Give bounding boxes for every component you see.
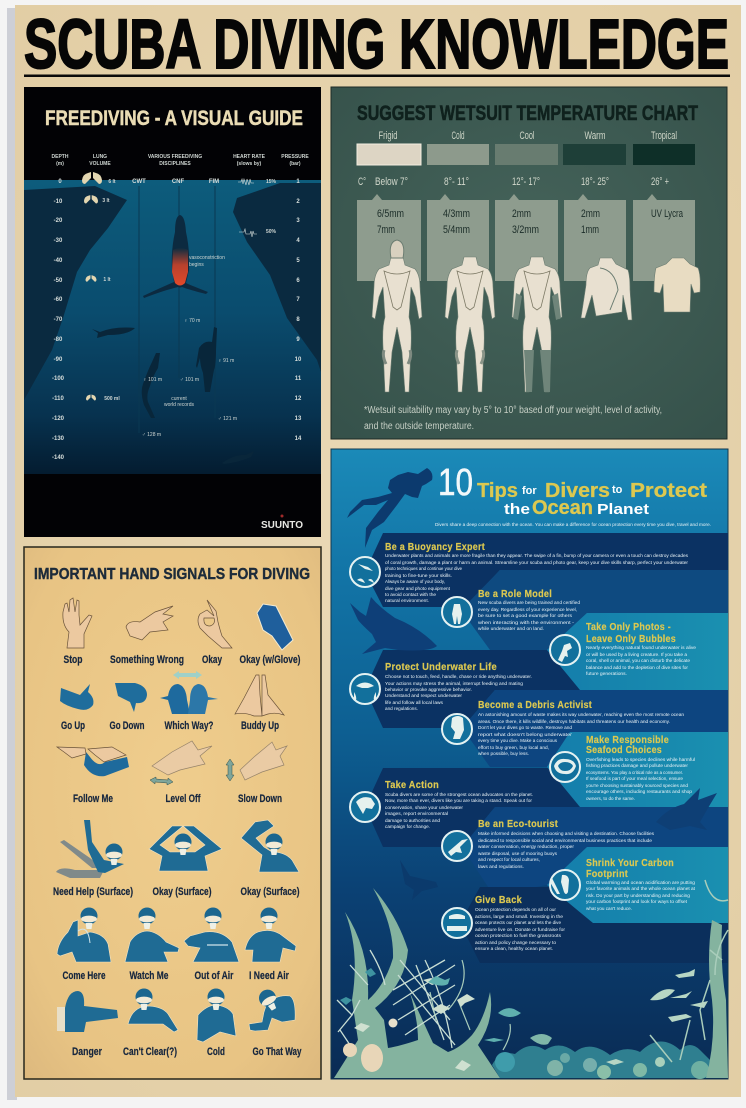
tip: give back: Give Back — [475, 895, 522, 906]
tip: photos: balance and add to the depletion of dive sites for — [586, 665, 688, 670]
tip: photos: Nearly everything natural found underwater is alive — [586, 645, 696, 650]
heading: ten tips: Planet — [597, 501, 649, 518]
discipline labels — [132, 179, 219, 185]
band: seafood — [547, 732, 728, 807]
tip: debris — [478, 700, 684, 756]
silhouette: scuba diver — [347, 468, 432, 548]
signal: which way — [160, 671, 218, 732]
temperature labels: Warm — [584, 130, 606, 142]
lung volume icons — [82, 172, 120, 402]
signal: cold — [197, 988, 236, 1058]
column headers: HEART RATE — [233, 154, 266, 160]
heading: ten tips: 10 — [438, 462, 473, 504]
text: vasoconstriction: vasoconstriction — [189, 255, 225, 261]
tip: buoyancy: natural environment. — [385, 598, 429, 603]
pressure scale: 14 — [295, 436, 302, 442]
silhouette: shark lower — [400, 860, 438, 900]
seaweed and coral — [334, 880, 728, 1079]
column headers: LUNG — [93, 154, 107, 160]
tip: eco-tourist: waste disposal, use of mooring buoys — [478, 851, 558, 856]
signal: level off — [150, 741, 212, 805]
tip: seafood: owners, to do the same. — [586, 796, 635, 801]
intro text: Divers share a deep connection with the ocean. You can make a difference for ocean protection every time you dive, travel and more. — [435, 522, 711, 527]
heart rate values — [266, 179, 277, 235]
tip: eco-tourist: dedicated to responsible social and environmental business practices that include — [478, 838, 652, 843]
tip: take action: Take Action — [385, 780, 439, 791]
tip: take action: Scuba divers are some of the strongest ocean advocates on the planet. — [385, 792, 533, 797]
signal: something wrong — [110, 606, 184, 666]
title rule — [24, 74, 730, 77]
tip: seafood: Overfishing leads to species declines while harmful — [586, 757, 695, 762]
tip: role model: be sure to set a good example for others — [478, 613, 573, 618]
panel: wetsuit chart — [331, 87, 727, 439]
signal: go up: Go Up — [61, 720, 85, 732]
tip: debris: report what doesn't belong underwater — [478, 732, 573, 737]
record labels — [142, 318, 237, 438]
depth scale: -120 — [52, 416, 65, 422]
signal: go that way: Go That Way — [252, 1046, 302, 1058]
signal: buddy up: Buddy Up — [241, 720, 279, 732]
fish — [92, 328, 135, 338]
column headers: PRESSURE — [281, 154, 309, 160]
signal: i need air — [245, 908, 296, 982]
tip: seafood: Seafood Choices — [586, 745, 662, 756]
temperature labels: Frigid — [378, 130, 398, 142]
heading: ten tips: Ocean — [532, 497, 593, 519]
signal: come here: Come Here — [62, 970, 106, 982]
lung volume icons: 6 lt — [108, 179, 116, 185]
tip: give back — [475, 895, 565, 951]
wetsuit: full — [445, 257, 495, 392]
tip: photos: coral, shell or animal, you can disturb the delicate — [586, 658, 690, 663]
tip: eco-tourist: laws and regulations. — [478, 864, 524, 869]
heart rate traces — [238, 179, 257, 237]
tip: eco-tourist — [478, 819, 655, 869]
silhouette: shark — [350, 597, 437, 654]
depth scale: -110 — [52, 396, 64, 402]
tip: debris: Become a Debris Activist — [478, 700, 592, 711]
band: buoyancy — [365, 533, 728, 607]
discipline labels: CWT — [132, 179, 146, 185]
tip: shrink carbon: your carbon footprint and look for ways to offset — [586, 899, 688, 904]
depth scale: 0 — [58, 179, 62, 185]
column headers: VOLUME — [89, 161, 111, 167]
tip: take action — [385, 780, 533, 829]
signal: slow down — [226, 742, 287, 805]
pressure scale: 8 — [296, 317, 300, 323]
dark rock walls — [24, 183, 321, 400]
temperature ranges: 12°- 17° — [512, 176, 540, 188]
poster shadow — [7, 8, 17, 1100]
tip: debris: An astonishing amount of waste makes its way underwater, reaching even the most remote ocean — [478, 712, 684, 717]
tip: protect: Your actions may stress the animal, interrupt feeding and mating — [385, 681, 523, 686]
record labels: world records — [164, 402, 195, 408]
column headers: DEPTH — [52, 154, 69, 160]
depth scale — [52, 179, 65, 461]
thickness text: 7mm — [377, 224, 395, 236]
tip: take action: damage to authorities and — [385, 818, 440, 823]
tip: eco-tourist: water conservation, energy reduction, proper — [478, 844, 574, 849]
depth scale: -60 — [54, 297, 63, 303]
signal: danger — [57, 991, 118, 1058]
depth scale: -50 — [54, 278, 63, 284]
panel: freediving guide — [24, 87, 321, 537]
depth scale: -70 — [54, 317, 63, 323]
signal: stop — [63, 598, 92, 666]
thickness text: 2mm — [581, 208, 600, 220]
record labels: ♂ 101 m — [180, 377, 199, 383]
signal: danger: Danger — [72, 1046, 103, 1058]
tip: protect: behavior or provoke aggressive behavior. — [385, 687, 472, 692]
tip: role model: when interacting with the environment - — [478, 620, 575, 625]
thickness boxes — [357, 194, 695, 281]
signal: slow down: Slow Down — [238, 793, 282, 805]
band: shrink carbon — [547, 847, 728, 923]
diver left — [142, 353, 160, 418]
tip: buoyancy: dive gear and photo equipment — [385, 586, 451, 591]
wetsuit: full hooded — [372, 240, 422, 392]
thickness text: UV Lycra — [651, 208, 684, 220]
thickness text: 1mm — [581, 224, 599, 236]
tip: photos: or will be used by a living creature. If you take a — [586, 652, 687, 657]
signal: go down: Go Down — [110, 720, 145, 732]
column headers — [52, 154, 309, 167]
signal: okay glove: Okay (w/Glove) — [240, 654, 301, 666]
heading: ten tips — [438, 462, 707, 519]
thickness text: 2mm — [512, 208, 531, 220]
tip: give back: ensure a clean, healthy ocean planet. — [475, 946, 553, 951]
tip: seafood: you're choosing sustainably sourced species and — [586, 783, 688, 788]
pressure scale: 11 — [295, 376, 302, 382]
temperature ranges: 18°- 25° — [581, 176, 609, 188]
tip: buoyancy: to avoid contact with the — [385, 592, 436, 597]
tip: give back: Ocean protection depends on all of our — [475, 907, 556, 912]
tip: debris: Don't let your dives go to waste. Remove and — [478, 725, 572, 730]
colour swatches — [357, 144, 695, 165]
depth scale: -140 — [52, 455, 65, 461]
heading: ten tips: Tips — [477, 480, 518, 502]
signal: go that way — [249, 987, 302, 1058]
tip: seafood: Make Responsible — [586, 735, 669, 746]
column headers: (bar) — [289, 161, 301, 167]
band: debris — [462, 690, 728, 767]
record labels: ♂ 128 m — [142, 432, 161, 438]
pressure scale: 3 — [296, 218, 300, 224]
pressure scale: 7 — [296, 297, 300, 303]
signal: follow me — [57, 747, 129, 805]
signal: come here — [57, 908, 111, 982]
band: photos — [547, 613, 728, 690]
tip: seafood — [586, 735, 695, 801]
wetsuit: shorty with sleeves — [512, 257, 562, 392]
signal: can't clear: Can't Clear(?) — [123, 1046, 177, 1058]
signal: okay surface one arm — [240, 820, 300, 898]
signal: okay surface both arms — [149, 826, 222, 898]
tip: shrink carbon: risk. Do your part by understanding and reducing — [586, 893, 690, 898]
signal: something wrong: Something Wrong — [110, 654, 184, 666]
tip: take action: conservation, share your underwater — [385, 805, 463, 810]
logo: suunto: SUUNTO — [261, 520, 303, 531]
band: protect — [365, 650, 600, 728]
band: role model — [461, 570, 728, 650]
tip: buoyancy: of coral growth, damage a plant or harm an animal. Streamline your scuba and photo gear, keep your dive skills sharp, perfect your underwater — [385, 560, 688, 565]
signal: level off: Level Off — [166, 793, 201, 805]
tip: buoyancy: Underwater plants and animals are more fragile than they appear. The swipe of a fin, bump of your camera or even a touch can destroy decades — [385, 553, 689, 558]
tip: protect: Protect Underwater Life — [385, 662, 497, 673]
tip: protect — [385, 662, 532, 711]
column headers: (m) — [56, 161, 64, 167]
tip: seafood: fishing practices damage and pollute underwater — [586, 763, 688, 768]
signal: okay surface both arms: Okay (Surface) — [152, 886, 212, 898]
temperature labels: Cool — [520, 130, 534, 142]
tip: shrink carbon: Shrink Your Carbon — [586, 858, 674, 869]
tip: photos: Leave Only Bubbles — [586, 634, 676, 645]
tip: take action: Now, more than ever, divers like you are taking a stand. Speak out for — [385, 798, 532, 803]
wetsuit: jacket — [581, 258, 632, 320]
wetsuit: rash guard — [654, 258, 700, 312]
text: vasoconstriction: begins — [189, 262, 204, 268]
icon details — [354, 564, 576, 931]
footnote: *Wetsuit suitability may vary by 5° to 10° based off your weight, level of activity, — [364, 405, 662, 416]
signal: watch me — [125, 908, 179, 982]
column headers: DISCIPLINES — [159, 161, 191, 167]
footnote — [364, 405, 662, 432]
signal: which way: Which Way? — [164, 720, 214, 732]
discipline labels: CNF — [172, 179, 184, 185]
depth scale: -80 — [54, 337, 63, 343]
tip: photos — [586, 622, 696, 676]
thickness text: 5/4mm — [443, 224, 470, 236]
depth scale: -90 — [54, 357, 63, 363]
tip: role model: Be a Role Model — [478, 589, 552, 600]
record labels: ♂ 121 m — [218, 416, 237, 422]
heading: ten tips: Divers — [545, 480, 610, 502]
tip: give back: action and policy change necessary to — [475, 940, 556, 945]
tip: buoyancy: photo techniques and continue your dive — [385, 566, 462, 571]
silhouette: shark right — [656, 788, 717, 830]
pressure scale: 6 — [296, 278, 300, 284]
record labels: ♀ 91 m — [218, 358, 234, 364]
band: give back — [460, 887, 728, 963]
pressure scale: 2 — [296, 199, 300, 205]
tip: buoyancy: Always be aware of your body, — [385, 579, 445, 584]
signal: okay surface one arm: Okay (Surface) — [240, 886, 300, 898]
column headers: (slows by) — [237, 161, 262, 167]
temperature ranges: C° — [358, 176, 366, 188]
tip: shrink carbon: Global warming and ocean acidification are putting — [586, 880, 695, 885]
pressure scale: 10 — [295, 357, 302, 363]
depth scale: -100 — [52, 376, 65, 382]
band: take action — [365, 768, 600, 847]
tip: protect: and regulations. — [385, 706, 418, 711]
temperature labels: Cold — [452, 130, 464, 142]
record labels: ♀ 101 m — [143, 377, 162, 383]
temperature labels — [378, 130, 677, 142]
thickness text: 3/2mm — [512, 224, 539, 236]
record labels: ♀ 70 m — [184, 318, 200, 324]
band: eco-tourist — [462, 807, 728, 890]
tip: give back: actions, large and small. Investing in the — [475, 914, 563, 919]
tip: shrink carbon: Footprint — [586, 869, 628, 880]
depth scale: -20 — [54, 218, 63, 224]
tip: seafood: If seafood is part of your meal selection, ensure — [586, 776, 683, 781]
heading: ten tips: for — [522, 485, 537, 497]
signal: okay hand — [198, 600, 232, 666]
icons: tip circles — [350, 557, 580, 938]
signal: i need air: I Need Air — [249, 970, 290, 982]
tip: buoyancy: training to fine-tune your skills. — [385, 573, 452, 578]
tip: photos: future generations. — [586, 671, 627, 676]
thickness text — [377, 208, 684, 236]
heading: ten tips: Protect — [630, 480, 707, 502]
tip: photos: Take Only Photos - — [586, 622, 671, 633]
tip: protect: life and follow all local laws — [385, 700, 444, 705]
panel heading: freediving: FREEDIVING - A VISUAL GUIDE — [45, 107, 303, 130]
pressure scale: 4 — [296, 238, 300, 244]
text: vasoconstriction — [189, 255, 225, 268]
record labels: current — [171, 396, 187, 402]
tip: seafood: encourage others, including restaurants and shop — [586, 789, 692, 794]
heading: ten tips: to — [612, 484, 623, 496]
signal: follow me: Follow Me — [73, 793, 113, 805]
pressure scale: 13 — [295, 416, 302, 422]
tip: debris: every time you dive. Make a conscious — [478, 738, 558, 743]
depth scale: -130 — [52, 436, 65, 442]
tip: shrink carbon: what you can't reduce. — [586, 906, 632, 911]
depth scale: -30 — [54, 238, 63, 244]
heading: ten tips: the — [504, 501, 530, 518]
heart rate values: 15% — [266, 179, 277, 185]
panel: ocean tips — [331, 449, 728, 1079]
tip: buoyancy — [385, 542, 689, 603]
tip: give back: ocean protection to fuel the grassroots — [475, 933, 562, 938]
temperature labels: Tropical — [651, 130, 677, 142]
signal: go up — [60, 684, 93, 732]
lung volume icons: 500 ml — [104, 396, 120, 402]
tip: give back: ocean protects our planet and lets the dive — [475, 920, 561, 925]
heart rate values: 50% — [266, 229, 277, 235]
pressure scale: 12 — [295, 396, 302, 402]
column headers: VARIOUS FREEDIVING — [148, 154, 202, 160]
tip: role model: every day. Regardless of your experience level, — [478, 607, 577, 612]
temperature ranges: Below 7° — [375, 176, 408, 188]
pressure scale: 9 — [296, 337, 300, 343]
pressure scale: 5 — [296, 258, 300, 264]
diver: red descending — [143, 215, 208, 298]
tip: debris: when possible, buy less. — [478, 751, 529, 756]
signal: out of air — [184, 908, 239, 982]
tip: debris: areas. Once there, it kills wildlife, destroys habitats and threatens our health and economy. — [478, 719, 670, 724]
signal: watch me: Watch Me — [130, 970, 168, 982]
thickness text: 6/5mm — [377, 208, 404, 220]
signal: can't clear — [123, 988, 178, 1058]
tip: give back: adventure live on. Donate or fundraise for — [475, 927, 565, 932]
tip: role model — [478, 589, 580, 631]
signal: out of air: Out of Air — [194, 970, 234, 982]
signal: buddy up — [235, 675, 284, 732]
panel heading: hand signals: IMPORTANT HAND SIGNALS FOR DIVING — [34, 566, 310, 583]
discipline lines — [139, 186, 215, 433]
signal: need help — [53, 820, 133, 898]
fish lower — [222, 451, 254, 464]
depth scale: -40 — [54, 258, 63, 264]
discipline labels: FIM — [209, 179, 219, 185]
signal: go down — [110, 683, 147, 732]
tip: eco-tourist: and respect for local cultures, — [478, 857, 540, 862]
tip: eco-tourist: Make informed decisions when choosing and visiting a destination. Choose facilities — [478, 831, 655, 836]
diver right — [196, 327, 217, 392]
tip: protect: Understand and respect underwater — [385, 693, 462, 698]
tip: role model: New scuba divers are being trained and certified — [478, 600, 580, 605]
signal: stop: Stop — [64, 654, 83, 666]
tip: eco-tourist: Be an Eco-tourist — [478, 819, 558, 830]
lung volume icons: 1 lt — [103, 277, 111, 283]
logo: suunto — [261, 514, 303, 531]
thickness text: 4/3mm — [443, 208, 470, 220]
temperature ranges: 26° + — [651, 176, 669, 188]
signal: cold: Cold — [207, 1046, 225, 1058]
pressure scale: 1 — [296, 179, 300, 185]
tip: buoyancy: Be a Buoyancy Expert — [385, 542, 485, 553]
tip: role model: while underwater and on land. — [478, 626, 544, 631]
temperature ranges: 8°- 11° — [444, 176, 469, 188]
tip: seafood: ecosystems. You play a critical role as a consumer. — [586, 770, 683, 775]
tip: debris: effort to buy green, buy local and, — [478, 745, 549, 750]
signal: need help: Need Help (Surface) — [53, 886, 133, 898]
footnote: and the outside temperature. — [364, 421, 474, 432]
panel: hand signals — [24, 547, 321, 1079]
tip: take action: images, report environmental — [385, 811, 448, 816]
tip: take action: campaign for change. — [385, 824, 430, 829]
tip: shrink carbon: your favorite animals and the whole ocean planet at — [586, 886, 696, 891]
temperature ranges — [358, 176, 669, 188]
signal: okay glove — [240, 604, 301, 666]
tip: protect: Choose not to touch, feed, handle, chase or ride anything underwater. — [385, 674, 532, 679]
lung volume icons: 3 lt — [102, 198, 110, 204]
depth scale: -10 — [54, 199, 63, 205]
pressure scale — [295, 179, 302, 442]
tip: shrink carbon — [586, 858, 696, 911]
signal: okay hand: Okay — [202, 654, 223, 666]
